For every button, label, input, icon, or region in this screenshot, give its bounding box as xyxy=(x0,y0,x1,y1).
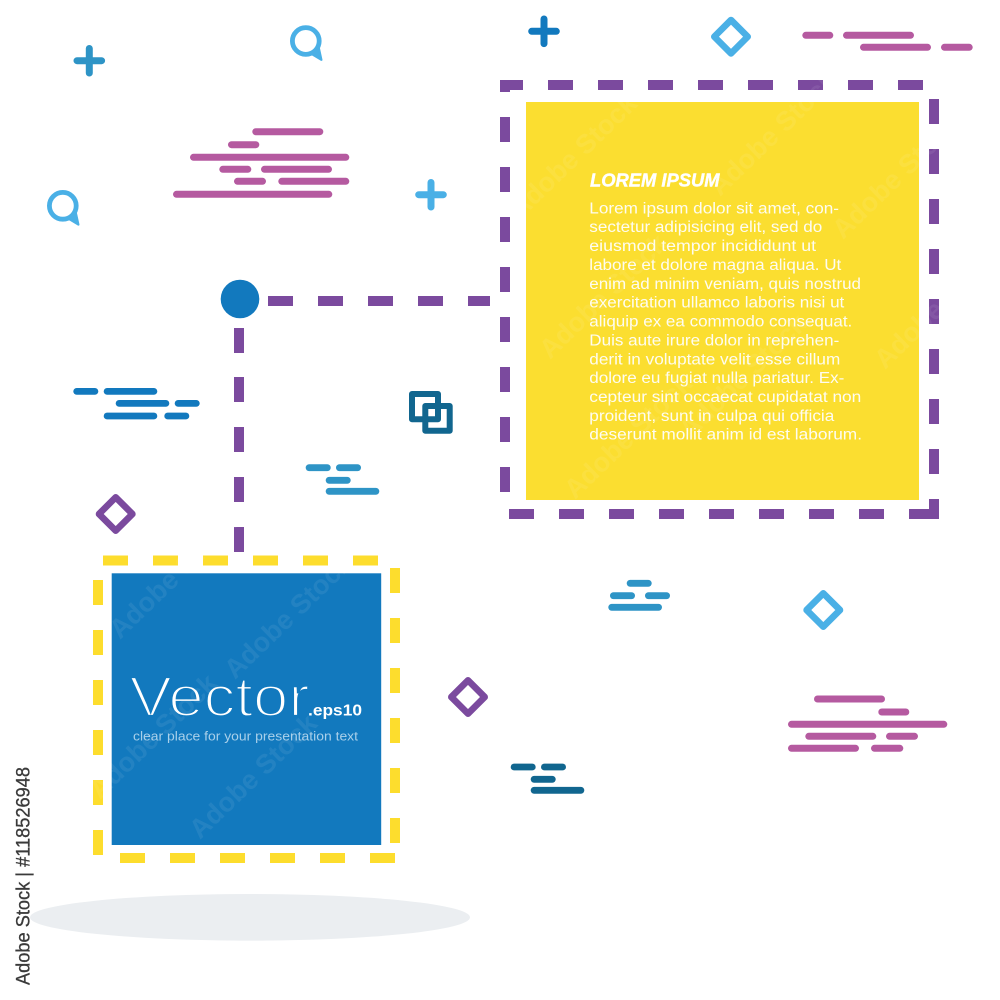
watermark: diagonal adobe stock pattern: Adobe Stock xyxy=(503,87,644,224)
text block: lorem ipsum paragraph: deserunt mollit anim id est laborum. xyxy=(589,427,862,444)
lines: magenta cluster top right xyxy=(802,32,973,51)
panel: purple dashed frame xyxy=(500,80,939,519)
floor shadow ellipse xyxy=(30,894,470,941)
heading: vector: Vector xyxy=(130,665,310,729)
connector: horizontal purple dashed line xyxy=(268,296,490,306)
lines: magenta cluster upper left xyxy=(173,128,349,198)
text block: lorem ipsum paragraph: labore et dolore magna aliqua. Ut xyxy=(589,257,842,274)
connector node: blue circle xyxy=(221,280,259,318)
icon: linked squares xyxy=(412,394,450,431)
icon: diamond light blue right xyxy=(807,593,840,627)
heading: lorem ipsum: LOREM IPSUM xyxy=(590,170,720,190)
icon: diamond purple left xyxy=(99,497,132,531)
lines: magenta cluster lower right xyxy=(788,696,947,752)
watermark: diagonal adobe stock pattern xyxy=(83,64,1000,844)
text block: lorem ipsum paragraph: derit in voluptate velit esse cillum xyxy=(589,351,840,368)
lines: dark teal cluster bottom xyxy=(511,764,584,794)
lines: blue cluster left xyxy=(73,388,200,419)
text block: lorem ipsum paragraph: aliquip ex ea commodo consequat. xyxy=(589,314,852,330)
panel: blue title box xyxy=(112,573,381,845)
text block: lorem ipsum paragraph: sectetur adipisicing elit, sed do xyxy=(589,219,822,236)
watermark: diagonal adobe stock pattern: Adobe Stock xyxy=(103,507,244,644)
watermark: diagonal adobe stock pattern: Adobe Stock xyxy=(673,307,814,444)
icon: plus light blue xyxy=(419,182,443,207)
watermark: diagonal adobe stock pattern: Adobe Stock xyxy=(558,367,699,504)
watermark: diagonal adobe stock pattern: Adobe Stock xyxy=(533,227,674,364)
text block: lorem ipsum paragraph: exercitation ullamco laboris nisi ut xyxy=(589,295,845,312)
watermark: diagonal adobe stock pattern: Adobe Stock xyxy=(83,667,224,804)
text block: lorem ipsum paragraph: cepteur sint occaecat cupidatat non xyxy=(589,389,861,406)
text block: lorem ipsum paragraph: enim ad minim veniam, quis nostrud xyxy=(589,276,861,293)
watermark: diagonal adobe stock pattern: Adobe Stock xyxy=(183,707,324,844)
text block: tagline: clear place for your presentation text xyxy=(133,729,358,744)
lines: teal cluster centre left xyxy=(306,464,379,495)
panel: yellow text box xyxy=(526,102,919,500)
icon: speech bubble top xyxy=(292,28,321,60)
text block: lorem ipsum paragraph xyxy=(589,200,862,444)
text block: lorem ipsum paragraph: Lorem ipsum dolor sit amet, con- xyxy=(589,200,839,217)
icon: diamond light blue top xyxy=(714,20,748,53)
icon: diamond purple centre xyxy=(451,680,485,714)
icon: plus blue xyxy=(532,19,556,44)
text block: lorem ipsum paragraph: Duis aute irure dolor in reprehen- xyxy=(589,332,839,349)
lines: teal cluster centre right xyxy=(608,580,670,611)
icon: speech bubble left xyxy=(49,192,78,225)
watermark: diagonal adobe stock pattern: Adobe Stock xyxy=(826,107,967,244)
text block: lorem ipsum paragraph: eiusmod tempor incididunt ut xyxy=(589,238,817,255)
text block: lorem ipsum paragraph: dolore eu fugiat nulla pariatur. Ex- xyxy=(589,370,844,387)
label: eps10: .eps10 xyxy=(308,703,362,720)
text block: lorem ipsum paragraph: proident, sunt in culpa qui officia xyxy=(589,408,835,425)
watermark: diagonal adobe stock pattern: Adobe Stock xyxy=(703,64,844,201)
watermark: adobe stock side label: Adobe Stock | #118526948 xyxy=(13,767,34,985)
watermark: diagonal adobe stock pattern: Adobe Stock xyxy=(218,547,359,684)
icon: plus teal xyxy=(77,48,102,73)
panel: yellow dashed frame xyxy=(93,556,400,863)
connector: vertical purple dashed line xyxy=(234,328,244,552)
